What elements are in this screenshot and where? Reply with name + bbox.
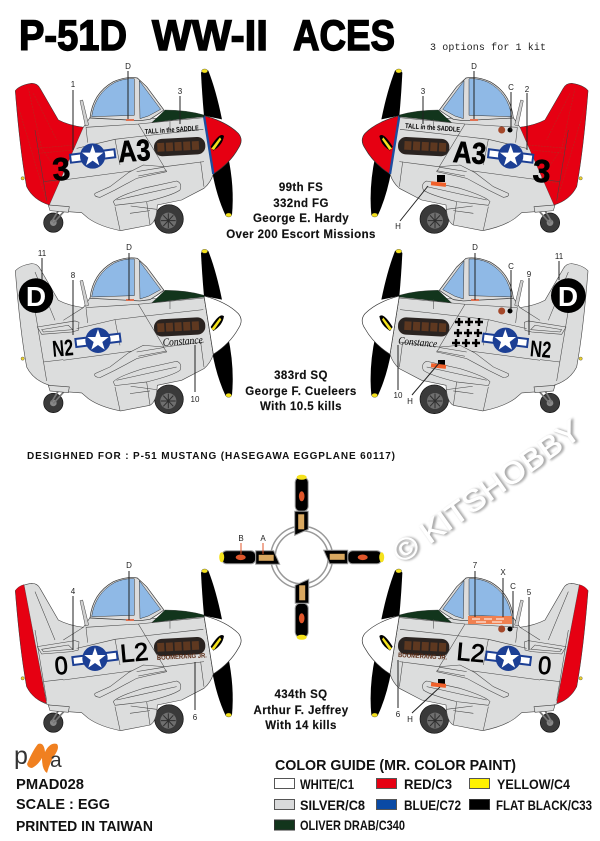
color guide [274, 757, 592, 833]
plane: 434th SQ right view: L2 [456, 638, 486, 668]
plane: 99th FS left view: D [125, 62, 131, 71]
logo: PMA: a [50, 749, 62, 772]
plane: 99th FS right view: 3 [421, 87, 426, 96]
plane: 383rd SQ right view: 10 [394, 391, 403, 400]
plane: 434th SQ left view: L2 [119, 638, 149, 668]
logo: PMA: p [14, 742, 28, 770]
product info: PRINTED IN TAIWAN [16, 818, 153, 835]
color guide: COLOR GUIDE (MR. COLOR PAINT) [275, 757, 516, 774]
plane: 383rd SQ left view: D [126, 243, 132, 252]
caption: 434th SQ: Arthur F. Jeffrey [254, 705, 349, 717]
swatch row one: WHITE/C1 [300, 776, 354, 792]
plane: 383rd SQ right view: C [508, 262, 514, 271]
plane: 434th SQ left view: 4 [71, 587, 76, 596]
plane: 99th FS left view: 3 [178, 87, 183, 96]
plane: 383rd SQ right view: 9 [527, 270, 532, 279]
swatch row one [274, 776, 570, 792]
swatch row one: YELLOW/C4 [497, 776, 570, 792]
plane: 383rd SQ right view [362, 243, 588, 414]
title: ACES [293, 12, 395, 60]
caption: 434th SQ: With 14 kills [265, 720, 337, 732]
product info: PMAD028 [16, 776, 84, 793]
plane: 99th FS right view: D [471, 62, 477, 71]
propeller diagram: A [260, 534, 266, 543]
title: P-51D [19, 12, 127, 60]
plane: 434th SQ left view [15, 561, 241, 733]
plane: 99th FS left view: TALL in the SADDLE [145, 125, 199, 136]
swatch row three [274, 817, 405, 833]
plane: 434th SQ right view: 6 [396, 710, 401, 719]
title: WW-II [152, 12, 268, 60]
caption: 99th FS: 332nd FG [273, 198, 329, 210]
kill markings [452, 318, 483, 347]
plane: 383rd SQ left view: D [26, 281, 46, 312]
plane: 383rd SQ left view: Constance [162, 334, 203, 349]
plane: 434th SQ right view: BOOMERANG JR. [398, 652, 447, 662]
watermark: © KITSHOBBY [387, 414, 587, 570]
plane: 383rd SQ right view: H [407, 397, 413, 406]
caption: 99th FS: 99th FS [279, 182, 323, 194]
compatibility note: DESIGHNED FOR : P-51 MUSTANG (HASEGAWA EGGPLANE 60117) [27, 451, 395, 462]
plane: 434th SQ right view: C [510, 582, 516, 591]
title [19, 12, 395, 60]
product info [16, 776, 153, 835]
caption: 434th SQ [254, 689, 349, 732]
plane: 383rd SQ left view: 10 [191, 395, 200, 404]
plane: 99th FS left view: 3 [51, 150, 71, 188]
swatch row one: RED/C3 [404, 776, 452, 792]
swatch row two: SILVER/C8 [300, 797, 365, 813]
plane: 99th FS right view: 3 [532, 152, 552, 190]
caption: 383rd SQ [245, 370, 357, 413]
plane: 434th SQ right view: 0 [537, 652, 552, 681]
caption: 383rd SQ: With 10.5 kills [260, 401, 342, 413]
plane: 434th SQ left view: D [126, 561, 132, 570]
watermark: © KITSHOBBY [389, 415, 589, 570]
plane: 434th SQ right view: 7 [473, 561, 478, 570]
caption: 383rd SQ: 383rd SQ [274, 370, 328, 382]
plane: 99th FS right view: C [508, 83, 514, 92]
plane: 434th SQ right view: 5 [527, 588, 532, 597]
caption: 383rd SQ: George F. Cueleers [245, 386, 357, 398]
plane: 434th SQ right view [362, 561, 588, 733]
subtitle: options: 3 options for 1 kit [430, 42, 546, 54]
plane: 383rd SQ left view: 8 [71, 271, 76, 280]
propeller diagram [219, 475, 384, 640]
plane: 99th FS right view [362, 62, 588, 233]
plane: 383rd SQ right view: D [472, 243, 478, 252]
plane: 383rd SQ right view: Constance [398, 335, 438, 350]
caption: 434th SQ: 434th SQ [274, 689, 328, 701]
plane: 434th SQ left view: 0 [54, 652, 69, 681]
logo: PMA [14, 742, 62, 773]
plane: 434th SQ right view: X [500, 568, 506, 577]
plane: 99th FS right view: A3 [452, 136, 487, 171]
plane: 383rd SQ right view: D [558, 281, 578, 312]
plane: 383rd SQ left view [15, 243, 241, 414]
plane: 99th FS left view: A3 [117, 134, 151, 169]
plane: 99th FS left view [15, 62, 241, 233]
propeller diagram: B [238, 534, 244, 543]
plane: 99th FS left view: 1 [71, 80, 76, 89]
swatch row two [274, 797, 592, 813]
product info: SCALE : EGG [16, 796, 110, 813]
plane: 99th FS right view: 2 [525, 85, 530, 94]
plane: 99th FS right view: H [395, 222, 401, 231]
plane: 383rd SQ right view: 11 [555, 252, 564, 261]
plane: 434th SQ left view: BOOMERANG JR. [157, 652, 207, 662]
plane: 383rd SQ right view: N2 [529, 335, 552, 363]
plane: 383rd SQ left view: 11 [38, 249, 47, 258]
caption: 99th FS: Over 200 Escort Missions [226, 229, 376, 241]
plane: 434th SQ right view: H [407, 715, 413, 724]
swatch row two: BLUE/C72 [404, 797, 461, 813]
swatch row three: OLIVER DRAB/C340 [300, 817, 405, 833]
plane: 383rd SQ left view: N2 [51, 334, 74, 362]
caption: 99th FS: George E. Hardy [253, 213, 349, 225]
plane: 434th SQ left view: 6 [193, 713, 198, 722]
plane: 99th FS right view: TALL in the SADDLE [405, 123, 460, 134]
caption: 99th FS [226, 182, 376, 241]
